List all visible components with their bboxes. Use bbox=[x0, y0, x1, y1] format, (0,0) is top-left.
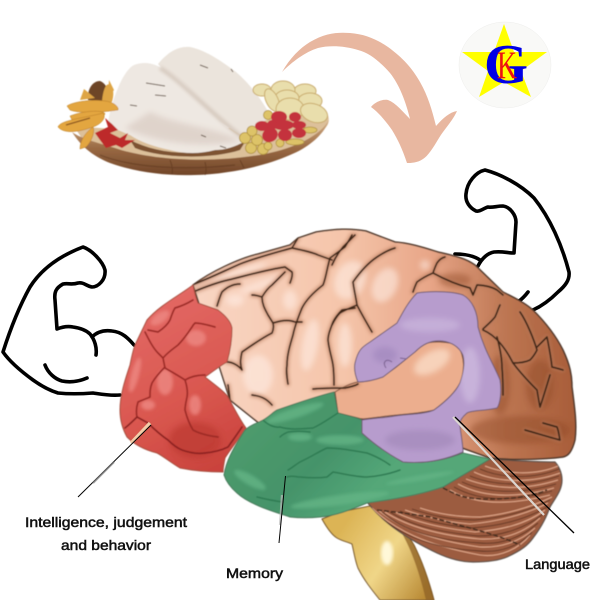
gap between mounds bbox=[160, 68, 243, 138]
cerebellum fissures bbox=[377, 488, 547, 545]
brainstem bbox=[322, 506, 434, 600]
gyri highlights bbox=[212, 256, 430, 395]
cerebellum folia bbox=[372, 466, 560, 556]
arrow bbox=[282, 33, 457, 163]
memory lobe: green region bbox=[224, 392, 490, 518]
label line two: and behavior bbox=[61, 537, 151, 553]
icon: right flexed arm outline bbox=[455, 170, 569, 310]
logo letter G: G bbox=[484, 34, 528, 96]
pointer line: intelligence bbox=[78, 423, 151, 497]
frontal lobe: red region bbox=[120, 285, 246, 472]
brainstem highlight bbox=[381, 541, 393, 565]
temporal finger highlight bbox=[410, 343, 454, 381]
icon: left flexed arm outline bbox=[3, 247, 134, 395]
sulci bbox=[192, 235, 563, 440]
purple fold bbox=[384, 358, 407, 368]
label: intelligence, judgement and behavior bbox=[25, 514, 187, 553]
dark nut left bbox=[88, 81, 109, 102]
brainstem shadow band bbox=[387, 516, 434, 600]
purple shading bbox=[373, 318, 480, 450]
pointer line: language bbox=[453, 417, 574, 533]
root slice shadow bbox=[66, 118, 90, 125]
bird's nest right mound bbox=[158, 47, 270, 136]
logo star bbox=[462, 24, 547, 97]
nest crevices bbox=[130, 65, 233, 148]
goji berries right bbox=[255, 111, 306, 145]
logo letter K: K bbox=[497, 44, 517, 87]
wooden plate bbox=[72, 120, 329, 175]
label line one: Intelligence, judgement bbox=[25, 514, 187, 530]
bird's nest left mound bbox=[108, 63, 245, 153]
logo: GK star badge bbox=[459, 22, 551, 108]
label: memory: Memory bbox=[226, 565, 283, 581]
red lobe sulci bbox=[125, 300, 242, 453]
sulci soft shadow bbox=[192, 235, 563, 440]
green highlights bbox=[234, 402, 442, 509]
brown shading bbox=[439, 273, 570, 444]
plate inner surface bbox=[75, 108, 329, 164]
label: language: Language bbox=[525, 556, 590, 572]
cerebellum bbox=[367, 459, 562, 562]
nest shadow on plate bbox=[130, 140, 245, 157]
orange root slices bbox=[58, 100, 118, 149]
green folds bbox=[257, 413, 400, 502]
yellow seeds bbox=[240, 110, 317, 154]
ginger slices bbox=[253, 81, 330, 126]
language lobe: purple region bbox=[355, 292, 501, 463]
nest shading bbox=[125, 112, 240, 144]
gold pieces left bbox=[80, 80, 114, 102]
red lobe shadow bbox=[169, 422, 221, 458]
plate wood grain bbox=[100, 155, 244, 175]
brain bbox=[120, 229, 576, 600]
goji berries left bbox=[95, 118, 135, 148]
logo disc bbox=[459, 22, 551, 108]
cerebrum base bbox=[192, 229, 576, 459]
temporal finger bbox=[335, 342, 464, 419]
icon: plate of bird's nest and herbs bbox=[58, 47, 330, 175]
pointer line: memory bbox=[279, 476, 286, 543]
red lobe highlights bbox=[126, 308, 206, 415]
